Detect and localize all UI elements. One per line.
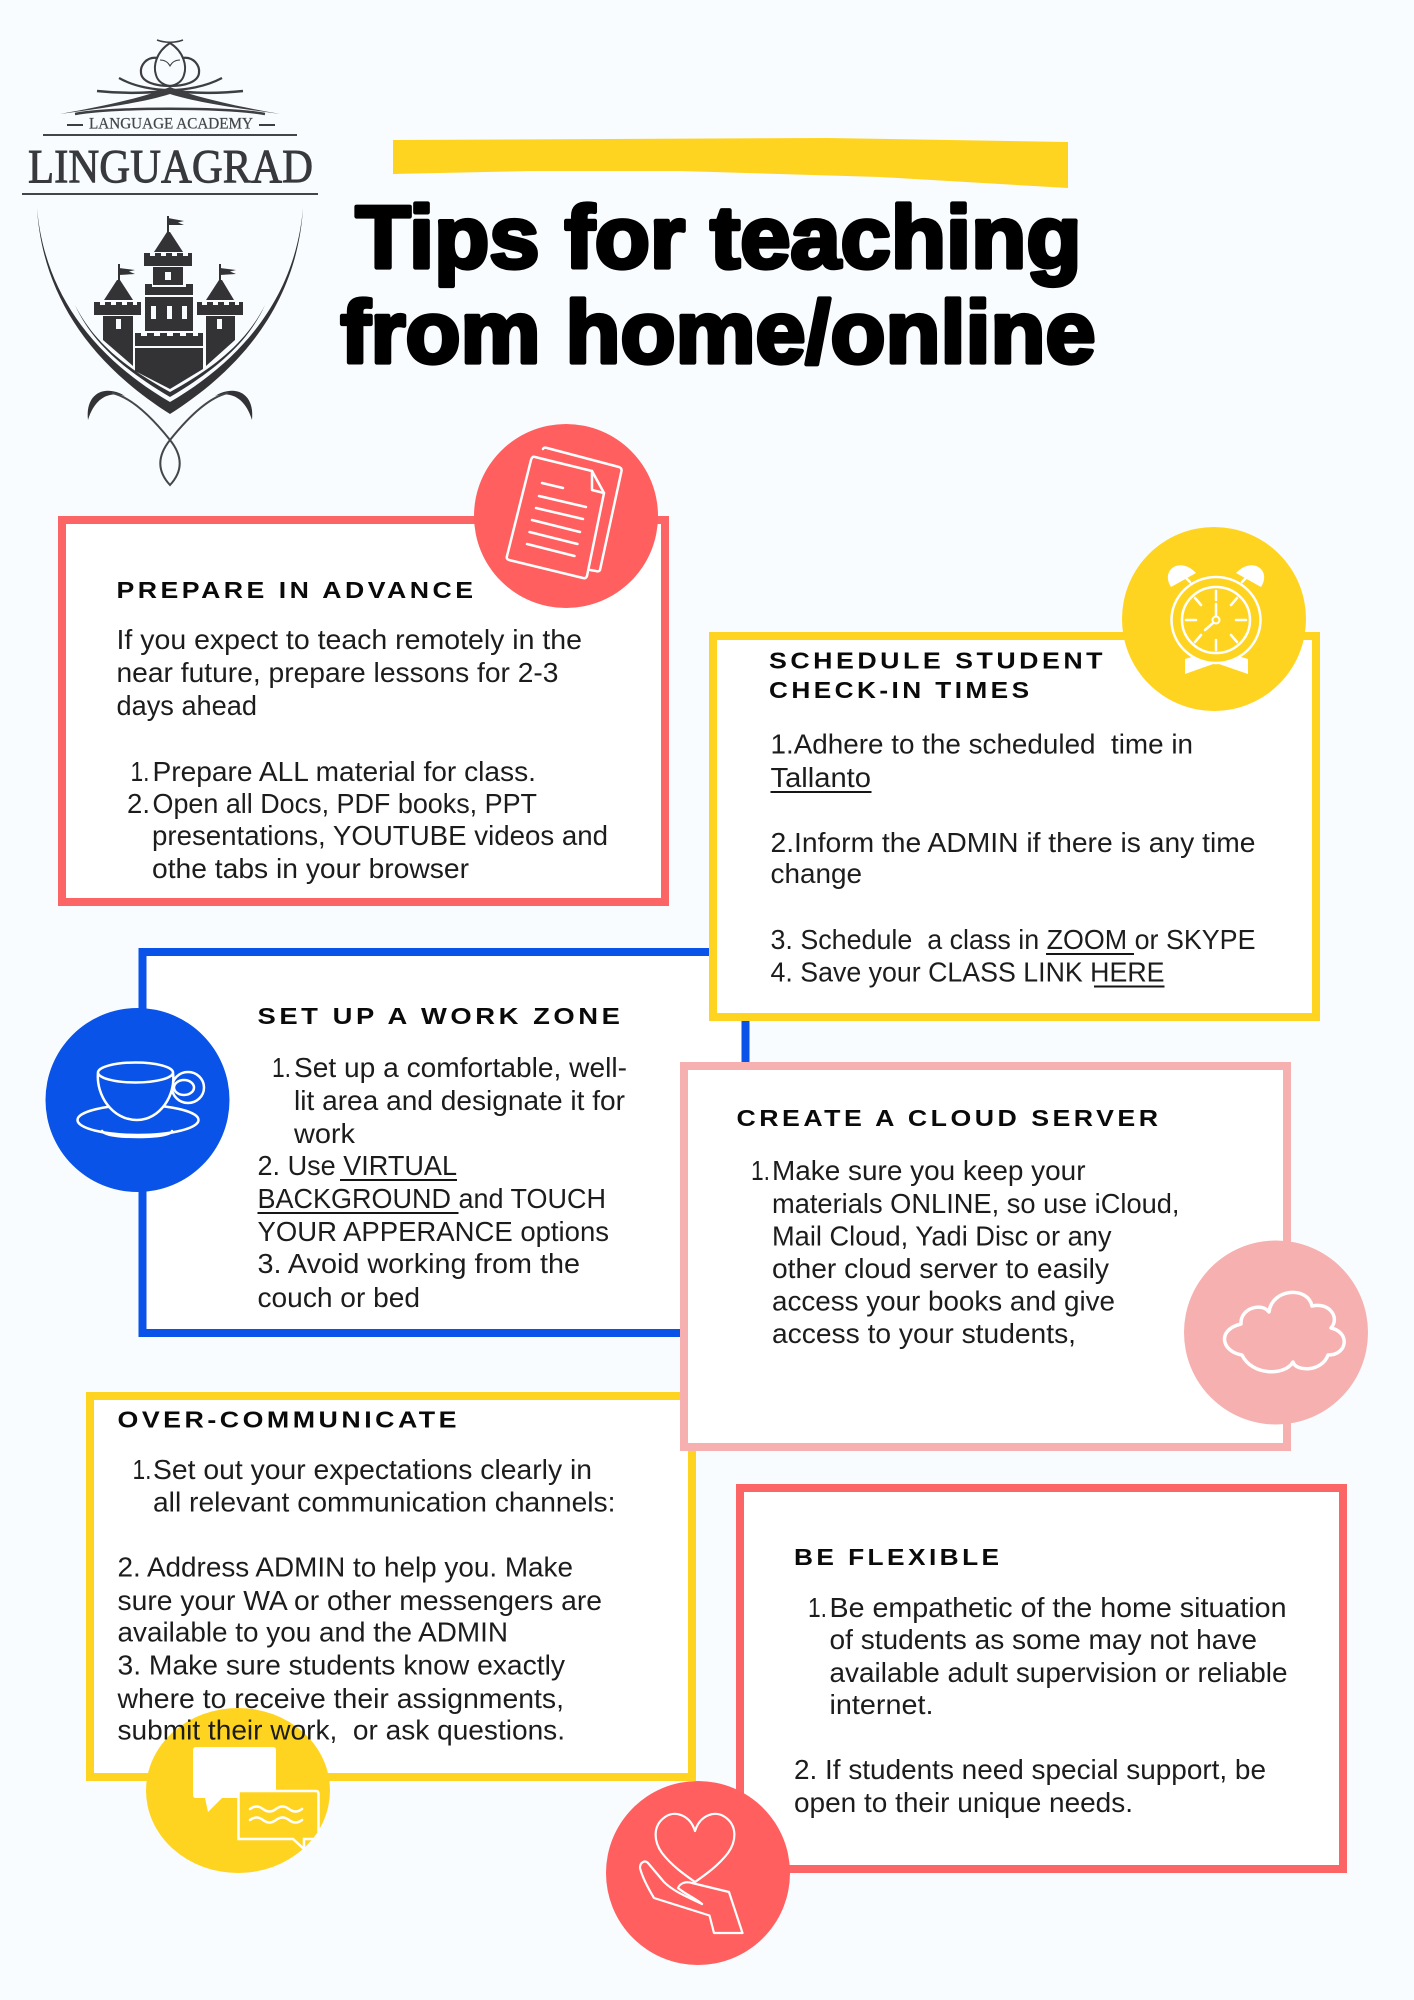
body text: other cloud server to easily (772, 1253, 1109, 1284)
body text: 2. (127, 788, 150, 819)
heading: CHECK-IN TIMES (769, 677, 1032, 703)
body text: lit area and designate it for (294, 1085, 625, 1116)
body text: available to you and the ADMIN (118, 1616, 508, 1648)
body text: couch or bed (258, 1282, 420, 1313)
body text: work (293, 1118, 356, 1149)
body text: If you expect to teach remotely in the (116, 624, 582, 655)
heading (769, 648, 1106, 703)
panel frame (713, 636, 1316, 1017)
logo: Linguagrad Language Academy (22, 40, 318, 485)
body text: access your books and give (772, 1286, 1115, 1316)
body text (770, 728, 1256, 988)
heading: OVER-COMMUNICATE (118, 1406, 460, 1432)
panel: schedule student check-in times (713, 527, 1316, 1017)
body text: days ahead (116, 690, 257, 721)
body text: Be empathetic of the home situation (830, 1592, 1286, 1623)
heading: PREPARE IN ADVANCE (116, 577, 476, 603)
body text: BACKGROUND and TOUCH (258, 1183, 606, 1214)
body text: access to your students, (772, 1318, 1076, 1349)
body text: Mail Cloud, Yadi Disc or any (772, 1220, 1112, 1252)
panel: be flexible (606, 1488, 1343, 1965)
logo ornament (75, 40, 265, 114)
body text: 4. Save your CLASS LINK HERE (770, 956, 1164, 988)
panel frame (90, 1396, 692, 1777)
panel: set up a work zone (46, 952, 746, 1333)
panel frame (684, 1066, 1287, 1447)
heading: BE FLEXIBLE (794, 1544, 1002, 1570)
title: from home/online (340, 282, 1096, 382)
body text: open to their unique needs. (794, 1787, 1133, 1818)
panel frame (62, 520, 665, 902)
body text: 2. Use VIRTUAL (258, 1150, 457, 1181)
icon circle: coffee cup (46, 1008, 230, 1192)
body text: Tallanto (770, 762, 871, 793)
title: Tips for teaching (356, 188, 1082, 286)
body text: Set up a comfortable, well- (294, 1052, 627, 1083)
body text: 1.Adhere to the scheduled time in (770, 728, 1193, 760)
body text: 2.Inform the ADMIN if there is any time (770, 827, 1256, 858)
body text: Open all Docs, PDF books, PPT (152, 788, 537, 819)
body text (794, 1592, 1288, 1818)
body text: Make sure you keep your (772, 1155, 1086, 1186)
body text: 3. Schedule a class in ZOOM or SKYPE (770, 924, 1256, 955)
icon circle: chat bubbles (146, 1708, 330, 1873)
title highlight bar (393, 138, 1068, 188)
body text: change (770, 858, 862, 889)
title (340, 188, 1096, 382)
icon circle: heart in hand (606, 1781, 790, 1965)
logo subtitle: LANGUAGE ACADEMY (89, 116, 253, 133)
icon circle: documents (474, 424, 658, 608)
body text: 1. (132, 1454, 152, 1485)
body text: presentations, YOUTUBE videos and (152, 820, 608, 851)
panel frame (740, 1488, 1343, 1869)
body text: 1. (272, 1052, 291, 1083)
heading: SCHEDULE STUDENT (769, 648, 1106, 674)
panel frame (142, 952, 746, 1333)
body text: 1. (130, 756, 150, 787)
body text (116, 1454, 616, 1746)
logo shield (37, 208, 303, 420)
body text: where to receive their assignments, (116, 1683, 564, 1714)
body text: 2. If students need special support, be (794, 1754, 1266, 1785)
logo roof (60, 87, 280, 114)
body text: available adult supervision or reliable (830, 1657, 1288, 1688)
body text: internet. (830, 1689, 934, 1720)
body text: all relevant communication channels: (153, 1486, 616, 1518)
body text: 2. Address ADMIN to help you. Make (118, 1552, 573, 1582)
logo swirl (112, 393, 228, 485)
body text (751, 1155, 1180, 1349)
heading: CREATE A CLOUD SERVER (736, 1105, 1162, 1131)
panel: create a cloud server (684, 1066, 1368, 1447)
logo wordmark: LINGUAGRAD (28, 141, 313, 194)
panel: over-communicate (90, 1396, 692, 1873)
body text: 3. Make sure students know exactly (118, 1650, 565, 1680)
body text: 1. (751, 1155, 770, 1186)
body text: 3. Avoid working from the (258, 1248, 580, 1279)
body text: submit their work, or ask questions. (118, 1714, 565, 1746)
icon circle: alarm clock (1122, 527, 1306, 711)
body text: Set out your expectations clearly in (153, 1454, 592, 1485)
body text: Prepare ALL material for class. (152, 756, 536, 787)
icon circle: cloud (1184, 1240, 1368, 1424)
body text: sure your WA or other messengers are (118, 1585, 602, 1616)
body text (116, 624, 608, 884)
body text: othe tabs in your browser (152, 853, 469, 884)
body text (258, 1052, 627, 1313)
heading: SET UP A WORK ZONE (258, 1003, 624, 1029)
logo castle (94, 216, 243, 389)
body text: materials ONLINE, so use iCloud, (772, 1188, 1180, 1219)
panel: prepare in advance (62, 424, 665, 902)
body text: YOUR APPERANCE options (258, 1216, 609, 1247)
body text: of students as some may not have (830, 1624, 1257, 1655)
body text: 1. (808, 1592, 827, 1623)
body text: near future, prepare lessons for 2-3 (116, 657, 558, 688)
